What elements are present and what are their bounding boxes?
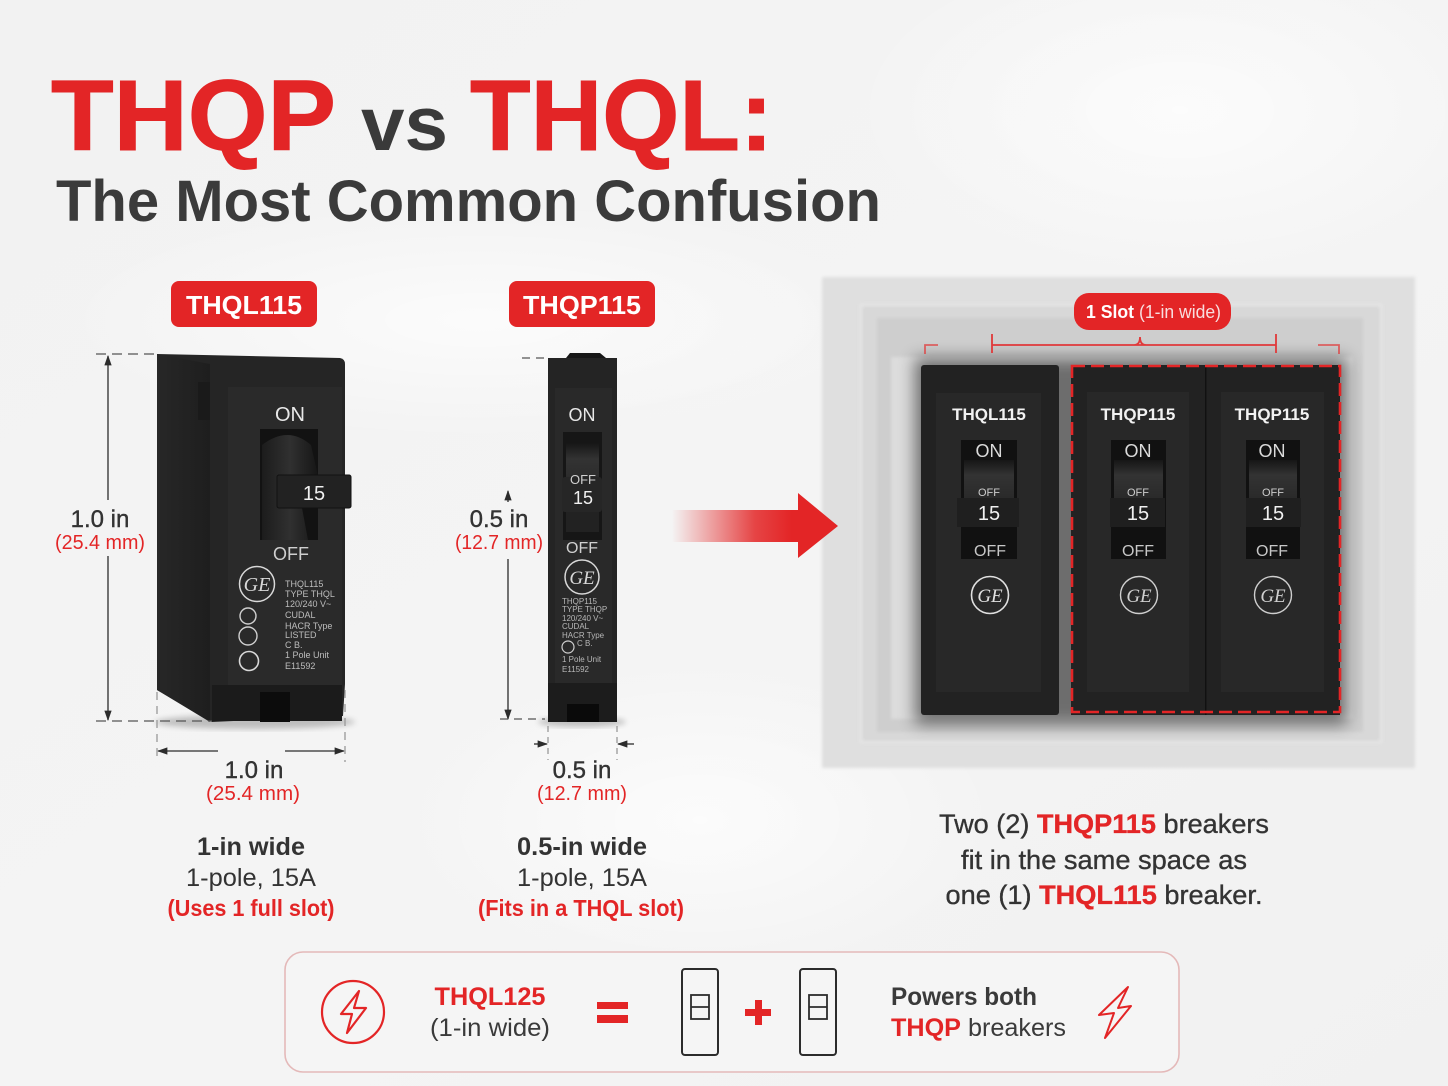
breaker photo: THQL115: E11592 [285, 661, 315, 671]
text: THQL125 [430, 983, 550, 1042]
label: THQL115 height: 1.0 in [71, 506, 129, 533]
breaker photo: THQP115: OFF [566, 540, 598, 557]
breaker photo: THQL115: C B. [285, 640, 303, 650]
breaker: THQP115 in panel, first [1071, 365, 1206, 715]
breaker: THQL115 in panel: 15 [978, 503, 1000, 525]
panel: THQL125 summary [285, 952, 1179, 1072]
text: THQL125: THQL125 [434, 983, 546, 1011]
breaker: THQP115 in panel, second [1205, 365, 1340, 715]
breaker photo: THQL115: 1 Pole Unit [285, 650, 330, 660]
dimension: THQL115 width [157, 690, 345, 762]
breaker photo: THQL115 [155, 354, 355, 729]
label: THQL115 height [55, 506, 145, 554]
text: THQP115 description: 1-pole, 15A [517, 864, 647, 892]
text: panel caption: fit in the same space as [961, 845, 1247, 875]
dimension: THQP115 height [500, 358, 545, 719]
label: THQP115 width: (12.7 mm) [537, 783, 627, 805]
title: THQL: [470, 60, 773, 172]
breaker: THQL115 in panel: THQL115 [952, 405, 1026, 424]
breaker: THQP115 in panel, second: OFF [1262, 487, 1284, 499]
label: THQL115 width: (25.4 mm) [206, 783, 300, 805]
text: powers both THQP breakers: THQP breakers [891, 1014, 1066, 1042]
breaker photo: THQP115: TYPE THQP [562, 605, 607, 614]
breaker: THQL115 in panel: OFF [974, 543, 1006, 560]
text: THQL115 description: 1-in wide [197, 833, 305, 861]
badge: THQL115: THQL115 [186, 290, 302, 320]
breaker photo: THQP115: ON [568, 405, 596, 425]
label: THQL115 width [206, 757, 300, 805]
title: vs [361, 82, 448, 167]
bracket: one slot width [925, 334, 1339, 354]
breaker photo: THQP115: 120/240 V~ [562, 614, 603, 623]
arrow: THQP fits panel [672, 493, 838, 558]
breaker photo: THQL115: THQL115 [285, 579, 323, 589]
label: THQL115 width: 1.0 in [225, 757, 283, 784]
text: THQL115 description [168, 833, 334, 921]
breaker: THQL115 in panel: GE [977, 586, 1003, 607]
breaker: THQP115 in panel, first: ON [1124, 441, 1152, 461]
title: THQP [51, 60, 336, 172]
text: THQL115 description: 1-pole, 15A [186, 864, 316, 892]
breaker: THQP115 in panel, second: THQP115 [1235, 405, 1309, 424]
breaker: THQP115 in panel, first: OFF [1127, 487, 1149, 499]
text: THQL115 description: (Uses 1 full slot) [168, 895, 334, 921]
subtitle: The Most Common Confusion [56, 169, 881, 234]
breaker: THQL115 in panel: OFF [978, 487, 1000, 499]
breaker photo: THQL115: HACR Type [285, 621, 332, 631]
label: THQL115 height: (25.4 mm) [55, 532, 145, 554]
breaker photo: THQP115 [538, 353, 626, 727]
breaker: THQL115 in panel: ON [976, 441, 1002, 461]
breaker photo: THQL115: TYPE THQL [285, 589, 335, 599]
text: powers both THQP breakers [891, 983, 1066, 1042]
breaker: THQP115 in panel, first: GE [1126, 586, 1152, 607]
badge: THQL115 [171, 281, 317, 327]
breaker photo: THQP115: HACR Type [562, 631, 605, 640]
text: panel caption: Two (2) THQP115 breakers [939, 809, 1269, 839]
icon: breaker one [682, 969, 718, 1055]
breaker: THQP115 in panel, first: OFF [1122, 543, 1154, 560]
text: THQP115 description: 0.5-in wide [517, 833, 647, 861]
breaker photo: THQL115: OFF [273, 544, 309, 564]
breaker photo: THQP115: GE [569, 568, 595, 589]
breaker: THQP115 in panel, first: 15 [1127, 503, 1149, 525]
breaker photo: THQP115: THQP115 [562, 597, 598, 606]
highlight: dashed outline around THQP pair [1072, 366, 1340, 712]
badge: 1 slot: 1 Slot [1086, 302, 1134, 322]
text: THQL125: (1-in wide) [430, 1014, 550, 1042]
breaker photo: THQL115: GE [244, 574, 270, 596]
breaker photo: THQP115: CUDAL [562, 622, 590, 631]
badge: 1 slot: (1-in wide) [1139, 302, 1221, 322]
breaker photo: THQP115: 1 Pole Unit [562, 655, 602, 664]
icon: plus [745, 1000, 771, 1025]
breaker: THQP115 in panel, second: OFF [1256, 543, 1288, 560]
icon: equals [597, 1002, 628, 1023]
text: THQP115 description: (Fits in a THQL slot) [478, 895, 684, 921]
breaker: THQP115 in panel, first: THQP115 [1101, 405, 1175, 424]
icon: breaker two [800, 969, 836, 1055]
breaker: THQP115 in panel, second: 15 [1262, 503, 1284, 525]
text: THQP115 description [478, 833, 684, 921]
text: panel caption [939, 809, 1269, 910]
breaker photo: THQL115: 15 [303, 483, 325, 505]
label: THQP115 height: 0.5 in [470, 506, 528, 533]
text: powers both THQP breakers: Powers both [891, 983, 1037, 1011]
breaker photo: THQP115: OFF [570, 472, 596, 487]
label: THQP115 height [455, 506, 543, 554]
dimension: THQL115 height [96, 354, 212, 721]
breaker photo: THQL115: CUDAL [285, 610, 316, 620]
breaker: THQP115 in panel, second: GE [1260, 586, 1286, 607]
panel: breaker box [822, 277, 1415, 768]
badge: 1 slot [1074, 293, 1231, 330]
icon: bolt [1099, 987, 1131, 1038]
breaker photo: THQP115: E11592 [562, 665, 590, 674]
label: THQP115 height: (12.7 mm) [455, 532, 543, 554]
badge: THQP115 [509, 281, 655, 327]
label: THQP115 width [537, 757, 627, 805]
text: panel caption: one (1) THQL115 breaker. [946, 880, 1262, 910]
breaker photo: THQL115: 120/240 V~ [285, 599, 331, 609]
breaker photo: THQP115: C B. [577, 639, 593, 648]
title [51, 60, 773, 172]
dimension: THQP115 width [534, 726, 634, 760]
breaker: THQP115 in panel, second: ON [1258, 441, 1286, 461]
breaker: THQL115 in panel [921, 365, 1059, 715]
breaker photo: THQL115: ON [275, 404, 305, 426]
breaker photo: THQP115: 15 [573, 488, 593, 508]
icon: bolt in circle [322, 981, 384, 1043]
badge: THQP115: THQP115 [523, 290, 641, 320]
breaker photo: THQL115: LISTED [285, 630, 317, 640]
label: THQP115 width: 0.5 in [553, 757, 611, 784]
